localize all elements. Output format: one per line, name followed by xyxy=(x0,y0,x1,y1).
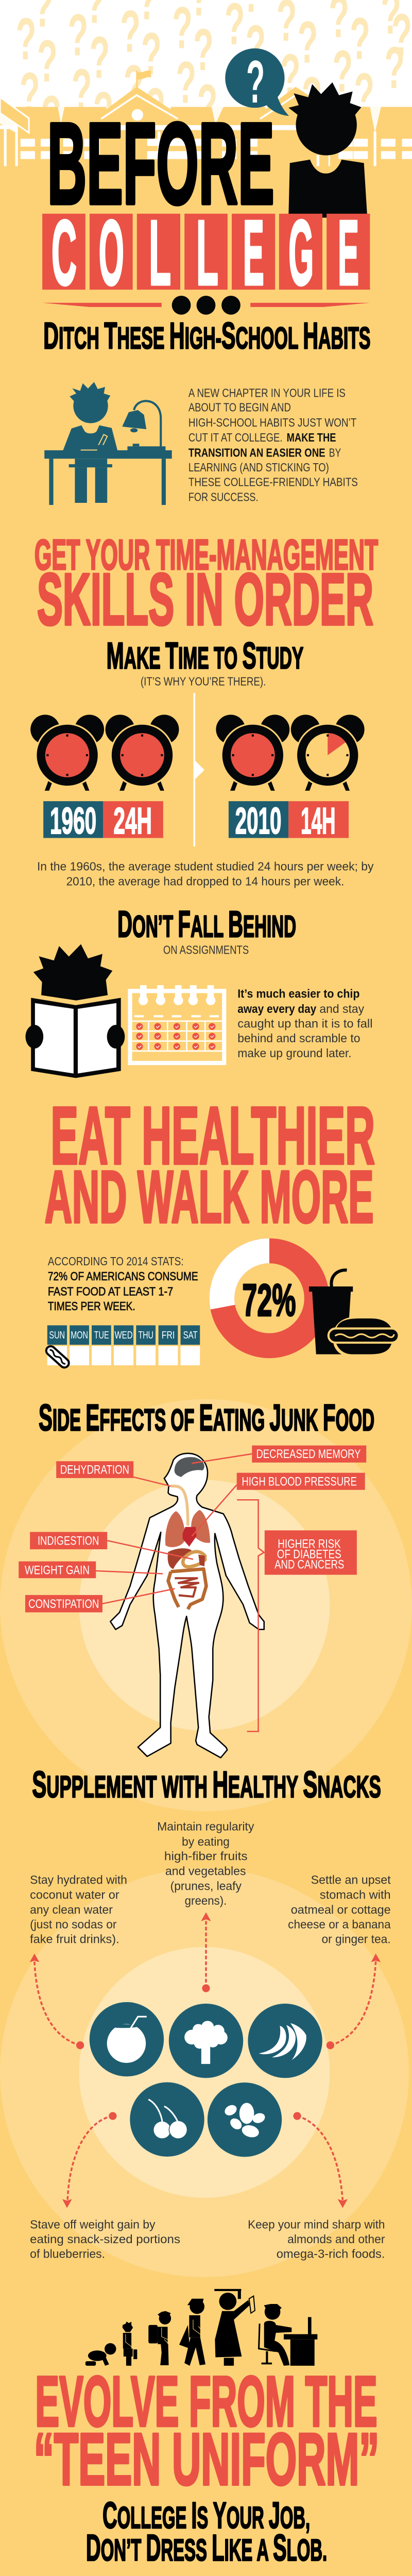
text block: intro: A NEW CHAPTER IN YOUR LIFE IS xyxy=(188,386,346,399)
background pattern: question marks xyxy=(16,0,412,150)
text block: intro: TRANSITION AN EASIER ONE xyxy=(188,446,325,460)
illustration: school buildings skyline xyxy=(0,71,412,170)
text block: maintain regularity: (prunes, leafy xyxy=(170,1879,242,1892)
text block: maintain regularity: high-fiber fruits xyxy=(164,1850,248,1863)
text block: intro: LEARNING (AND STICKING TO) xyxy=(188,461,329,474)
text block: chip away xyxy=(237,987,372,1060)
title: Before College xyxy=(42,99,370,304)
text block: stay hydrated: any clean water xyxy=(30,1903,113,1916)
text block: settle an upset stomach: oatmeal or cottage xyxy=(291,1903,391,1916)
text block: settle an upset stomach: stomach with xyxy=(320,1888,391,1902)
text block: stay hydrated: fake fruit drinks). xyxy=(30,1932,119,1945)
title tiles: College xyxy=(42,201,370,304)
background pattern: question marks: ? xyxy=(93,80,113,146)
heading: Eat healthier and walk more xyxy=(45,1090,375,1238)
text block: maintain regularity: by eating xyxy=(182,1835,230,1849)
text block: study hours: 2010, the average had dropped to 14 hours per week. xyxy=(66,874,344,888)
text block: maintain regularity xyxy=(157,1820,254,1907)
text block: maintain regularity: Maintain regularity xyxy=(157,1820,254,1833)
text block: stave off weight gain: eating snack-sized portions xyxy=(30,2232,180,2246)
background pattern: question marks: ? xyxy=(228,46,249,112)
text block: fast food stat: 72% OF AMERICANS CONSUME xyxy=(48,1269,198,1283)
label: 1960 24H xyxy=(43,800,163,842)
arrow: right xyxy=(327,1954,381,2049)
text block: intro: HIGH-SCHOOL HABITS JUST WON’T xyxy=(188,416,356,429)
icon: speech bubble with question mark xyxy=(225,48,289,116)
chart: week calendar: FRI xyxy=(162,1330,175,1341)
chart: week calendar: MON xyxy=(71,1330,88,1341)
figure: schoolchild xyxy=(148,2311,171,2365)
text block: keep your mind sharp: Keep your mind sharp with xyxy=(248,2218,385,2231)
background pattern: question marks: ? xyxy=(350,6,370,72)
background pattern: question marks: ? xyxy=(16,6,36,72)
label: 2010 14H: 14H xyxy=(301,800,336,842)
title tiles: College: E xyxy=(338,201,359,304)
label: 2010 14H: 2010 xyxy=(235,800,281,842)
background pattern: question marks: ? xyxy=(250,69,270,135)
background pattern: question marks: ? xyxy=(302,65,322,131)
label: higher risk: OF DIABETES xyxy=(277,1547,341,1561)
text block: intro: CUT IT AT COLLEGE. xyxy=(188,431,282,444)
panel: snacks and evolution xyxy=(30,2082,385,2500)
label: higher risk xyxy=(265,1530,357,1575)
text block: settle an upset stomach: or ginger tea. xyxy=(321,1932,391,1945)
figure: child xyxy=(123,2321,137,2366)
background pattern: question marks: ? xyxy=(246,13,266,79)
organ: liver and stomach xyxy=(168,1548,192,1569)
label: high blood pressure xyxy=(237,1473,365,1490)
text block: stay hydrated: Stay hydrated with xyxy=(30,1873,127,1887)
figure: baby xyxy=(85,2343,116,2366)
label: decreased memory xyxy=(252,1446,366,1463)
background pattern: question marks: ? xyxy=(41,84,61,150)
caption: it's why you're there: (IT’S WHY YOU’RE THERE). xyxy=(141,675,266,688)
text block: chip away: caught up than it is to fall xyxy=(237,1016,372,1030)
chart: week calendar: THU xyxy=(138,1330,153,1341)
panel: time management xyxy=(30,532,378,846)
background pattern: question marks: ? xyxy=(145,76,165,142)
icon: student silhouette xyxy=(288,82,367,217)
chart: 1960 alarm clocks xyxy=(30,715,179,791)
icon: broccoli xyxy=(169,2004,243,2078)
text block: fast food stat xyxy=(48,1255,198,1313)
chart: week calendar: SUN xyxy=(49,1330,65,1341)
icon: cherries xyxy=(130,2082,204,2157)
text block: maintain regularity: and vegetables xyxy=(165,1864,246,1877)
background: snacks concentric circles xyxy=(0,1868,409,2277)
caption: on assignments: ON ASSIGNMENTS xyxy=(163,943,249,957)
text block: chip away: away every day xyxy=(237,1002,316,1015)
panel: healthy snacks xyxy=(30,1764,391,2078)
text block: fast food stat: ACCORDING TO 2014 STATS: xyxy=(48,1255,184,1268)
text block: intro: BY xyxy=(329,446,341,460)
title tiles: College: C xyxy=(52,201,77,304)
text block: chip away: make up ground later. xyxy=(237,1046,352,1060)
text block: stave off weight gain xyxy=(30,2218,180,2261)
organ: lungs xyxy=(165,1510,210,1547)
label: weight gain xyxy=(19,1562,96,1578)
arrow: lower right xyxy=(293,2112,348,2208)
icon: student studying at a desk with lamp xyxy=(44,382,172,505)
text block: chip away: It’s much easier to chip xyxy=(237,987,359,1001)
subheading: College is your job, don't dress like a slob xyxy=(86,2495,327,2569)
text block: settle an upset stomach: cheese or a banana xyxy=(288,1918,391,1931)
text block: stave off weight gain: of blueberries. xyxy=(30,2247,105,2261)
background pattern: question marks: ? xyxy=(176,49,196,115)
label: constipation: CONSTIPATION xyxy=(28,1597,99,1611)
title tiles: College: O xyxy=(99,201,124,304)
label: high blood pressure: HIGH BLOOD PRESSURE xyxy=(242,1475,357,1489)
text block: intro: THESE COLLEGE-FRIENDLY HABITS xyxy=(188,475,358,488)
panel: dress code xyxy=(20,2495,393,2576)
organ: intestines xyxy=(168,1569,207,1609)
heading: Side Effects of Eating Junk Food: SIDE EFFECTS OF EATING JUNK FOOD xyxy=(39,1398,374,1439)
chart: 72% donut: 72% xyxy=(242,1275,296,1326)
text block: chip away: behind and scramble to xyxy=(237,1031,360,1045)
icon: calendar with check marks xyxy=(130,985,224,1063)
arrow: centre xyxy=(201,1912,211,1992)
chart: week calendar: WED xyxy=(114,1330,133,1341)
arrow: lower left xyxy=(62,2112,117,2208)
text block: stay hydrated: coconut water or xyxy=(30,1888,119,1902)
background pattern: question marks: ? xyxy=(37,28,58,94)
organ: heart xyxy=(183,1527,197,1547)
label: indigestion xyxy=(30,1532,107,1549)
subheading: College is your job, don't dress like a slob: DON’T DRESS LIKE A SLOB. xyxy=(86,2528,327,2569)
text block: keep your mind sharp: almonds and other xyxy=(287,2232,385,2246)
arrow: left xyxy=(30,1954,84,2049)
background pattern: question marks: ? xyxy=(89,25,110,91)
title tiles: College: G xyxy=(288,201,314,304)
background pattern: question marks: ? xyxy=(354,61,374,127)
text block: intro: ABOUT TO BEGIN AND xyxy=(188,400,291,414)
text block: settle an upset stomach xyxy=(288,1873,391,1945)
figure: office worker at desk xyxy=(259,2304,317,2366)
text block: stay hydrated xyxy=(30,1873,127,1945)
chart: week calendar: TUE xyxy=(94,1330,109,1341)
chart: 2010 alarm clocks xyxy=(216,715,365,791)
icon: coconut xyxy=(90,2002,164,2076)
heading: Evolve from the teen uniform xyxy=(34,2362,379,2500)
text block: fast food stat: FAST FOOD AT LEAST 1-7 xyxy=(48,1284,173,1298)
icon: bananas xyxy=(248,2004,322,2078)
label: decreased memory: DECREASED MEMORY xyxy=(256,1447,361,1461)
chart: week calendar: SAT xyxy=(183,1330,198,1341)
text block: intro: FOR SUCCESS. xyxy=(188,490,259,503)
label: higher risk: HIGHER RISK xyxy=(278,1537,341,1551)
organ: throat xyxy=(171,1486,188,1526)
background pattern: question marks: ? xyxy=(193,17,214,83)
text block: chip away: and stay xyxy=(319,1002,364,1015)
title tiles: College: L xyxy=(149,201,171,304)
figure: teen xyxy=(179,2299,205,2366)
title tiles: College: E xyxy=(243,201,264,304)
subheading: Don't Fall Behind: DON’T FALL BEHIND xyxy=(117,904,296,945)
label: constipation xyxy=(25,1595,102,1613)
panel: don't fall behind xyxy=(25,859,375,1238)
background pattern: question marks: ? xyxy=(120,0,141,65)
icon: speech bubble with question mark: ? xyxy=(246,48,265,115)
label: higher risk: AND CANCERS xyxy=(274,1557,344,1571)
figure: graduate xyxy=(214,2289,255,2366)
label: 1960 24H: 24H xyxy=(113,800,152,842)
organ: brain xyxy=(175,1457,204,1477)
background pattern: question marks: ? xyxy=(280,42,301,108)
background pattern: question marks: ? xyxy=(332,39,353,105)
heading: Get your time-management skills in order xyxy=(35,532,378,640)
text block: intro: MAKE THE xyxy=(287,431,336,444)
label: 1960 24H: 1960 xyxy=(50,800,96,842)
illustration: life stages silhouettes xyxy=(85,2289,317,2366)
label: 2010 14H xyxy=(229,800,349,842)
text block: study hours: In the 1960s, the average student studied 24 hours per week; by xyxy=(37,859,374,873)
background pattern: question marks: ? xyxy=(72,57,92,123)
text block: settle an upset stomach: Settle an upset xyxy=(311,1873,391,1887)
background pattern: question marks: ? xyxy=(298,9,318,75)
background pattern: question marks: ? xyxy=(141,21,162,87)
text block: stay hydrated: (just no sodas or xyxy=(30,1918,117,1931)
panel: eat healthier xyxy=(19,1251,399,1758)
title tiles: College: L xyxy=(196,201,218,304)
label: dehydration xyxy=(56,1461,133,1478)
background: side effects concentric circles xyxy=(0,1399,412,1811)
icon: student reading a book xyxy=(25,944,125,1078)
text block: study hours xyxy=(37,859,374,888)
background pattern: question marks: ? xyxy=(124,54,144,120)
background pattern: question marks: ? xyxy=(197,73,217,139)
label: indigestion: INDIGESTION xyxy=(38,1534,99,1548)
divider: red lines with three dots xyxy=(42,296,370,315)
text block: fast food stat: TIMES PER WEEK. xyxy=(48,1299,135,1313)
illustration: human body with organs xyxy=(110,1453,264,1758)
background pattern: question marks: ? xyxy=(20,61,40,127)
text block: keep your mind sharp: omega-3-rich foods. xyxy=(277,2247,385,2261)
arrow: divider from 1960 to 2010 xyxy=(194,693,204,846)
callout lines xyxy=(96,1454,264,1732)
chart: week calendar xyxy=(44,1325,200,1369)
label: dehydration: DEHYDRATION xyxy=(60,1463,129,1477)
text block: keep your mind sharp xyxy=(248,2218,385,2261)
subheading: Make Time to Study: MAKE TIME TO STUDY xyxy=(107,635,303,676)
icon: soda cup and hot dog xyxy=(309,1270,399,1357)
chart: 72% donut xyxy=(222,1251,317,1346)
text block: maintain regularity: greens). xyxy=(185,1894,227,1907)
text block: stave off weight gain: Stave off weight gain by xyxy=(30,2218,156,2231)
background pattern: question marks: ? xyxy=(68,3,88,69)
label: weight gain: WEIGHT GAIN xyxy=(25,1564,90,1578)
subtitle: Ditch These High-School Habits: DITCH THESE HIGH-SCHOOL HABITS xyxy=(43,315,370,357)
icon: almonds xyxy=(208,2082,282,2157)
subheading: College is your job, don't dress like a slob: COLLEGE IS YOUR JOB, xyxy=(102,2495,310,2536)
text block: intro xyxy=(188,386,358,503)
